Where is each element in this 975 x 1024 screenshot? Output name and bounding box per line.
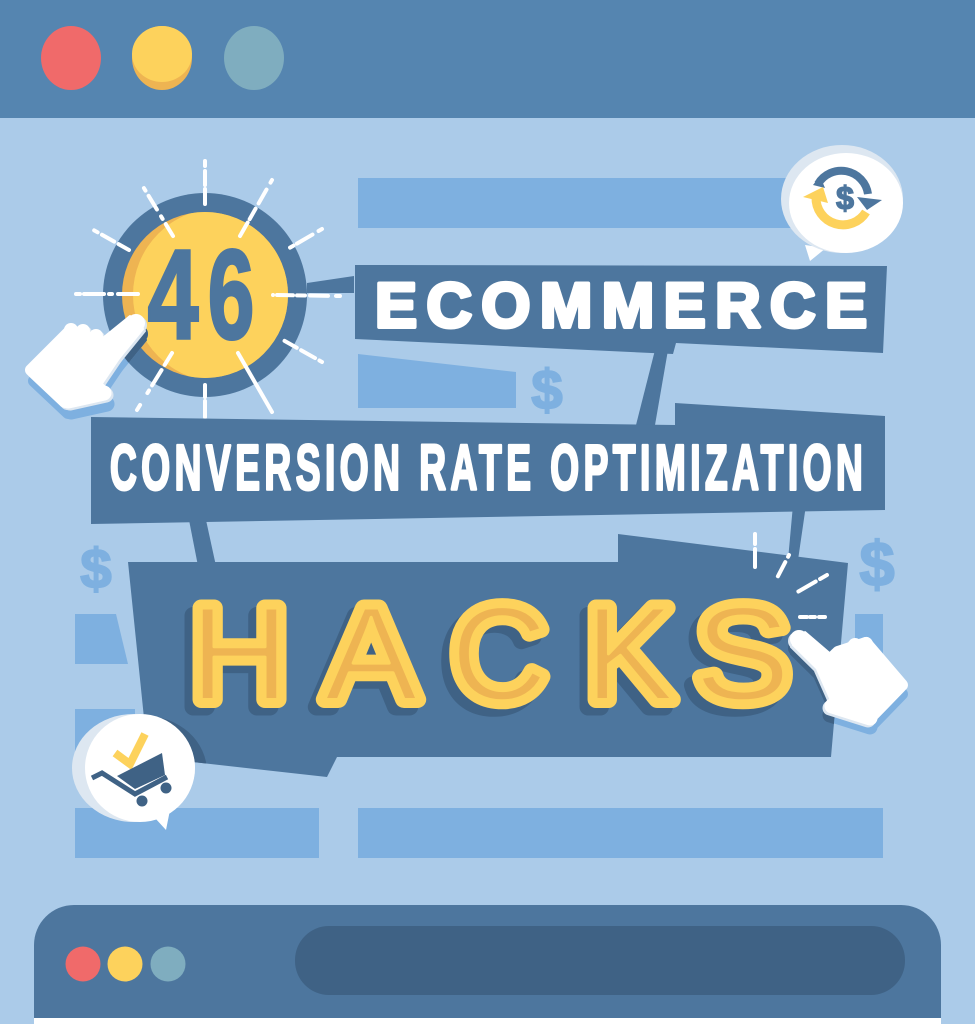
banner: hacks [128, 534, 848, 777]
hacks letters shadow [182, 587, 782, 736]
hacks letters shadow: S [687, 588, 782, 736]
badge: 46: 6 [208, 224, 254, 366]
banner: conversion rate optimization: CONVERSION RATE OPTIMIZATION [110, 433, 863, 504]
hacks letters outer yellow: C [451, 580, 547, 728]
hacks letters orange core: H [190, 579, 289, 728]
hand pointer: left [31, 314, 148, 413]
hacks letters outer yellow: A [324, 580, 418, 728]
background dollar signs [80, 358, 895, 600]
speech bubble: revenue cycle [781, 145, 903, 261]
sparkle rays around badge [70, 161, 340, 430]
hacks letters orange core: S [695, 580, 790, 728]
hacks letters orange core: A [324, 580, 418, 728]
browser window: bottom [34, 905, 941, 1024]
banner: conversion rate optimization [91, 403, 885, 524]
hacks letters orange core: C [451, 580, 547, 728]
banner connector tails [189, 276, 806, 566]
hacks letters shadow: C [443, 588, 539, 736]
hacks letters outer yellow: H [190, 579, 289, 728]
hacks letters orange core: K [585, 580, 674, 728]
sparkle rays near S [755, 534, 827, 617]
hacks letters shadow: K [577, 588, 666, 736]
hacks title [190, 579, 790, 728]
background placeholder bars [75, 178, 883, 858]
icon: cart with check mark [92, 734, 172, 806]
hand pointer: right [788, 630, 902, 728]
speech bubble: shopping cart [72, 714, 195, 830]
browser title bar [0, 0, 975, 118]
hacks letters orange core [190, 579, 790, 728]
badge: 46: 4 [148, 225, 198, 366]
hacks letters outer yellow: S [695, 580, 790, 728]
icon: cycling arrows with dollar: $ [836, 180, 854, 216]
badge: 46 [103, 193, 307, 397]
background dollar signs: $ [80, 537, 112, 600]
hacks letters shadow: A [316, 587, 410, 735]
banner: ecommerce: ECOMMERCE [375, 271, 867, 341]
hacks letters shadow: H [182, 587, 281, 736]
hacks letters outer yellow: K [585, 580, 674, 728]
background dollar signs: $ [859, 530, 895, 600]
hacks letters outer yellow [190, 579, 790, 728]
background dollar signs: $ [531, 358, 563, 421]
